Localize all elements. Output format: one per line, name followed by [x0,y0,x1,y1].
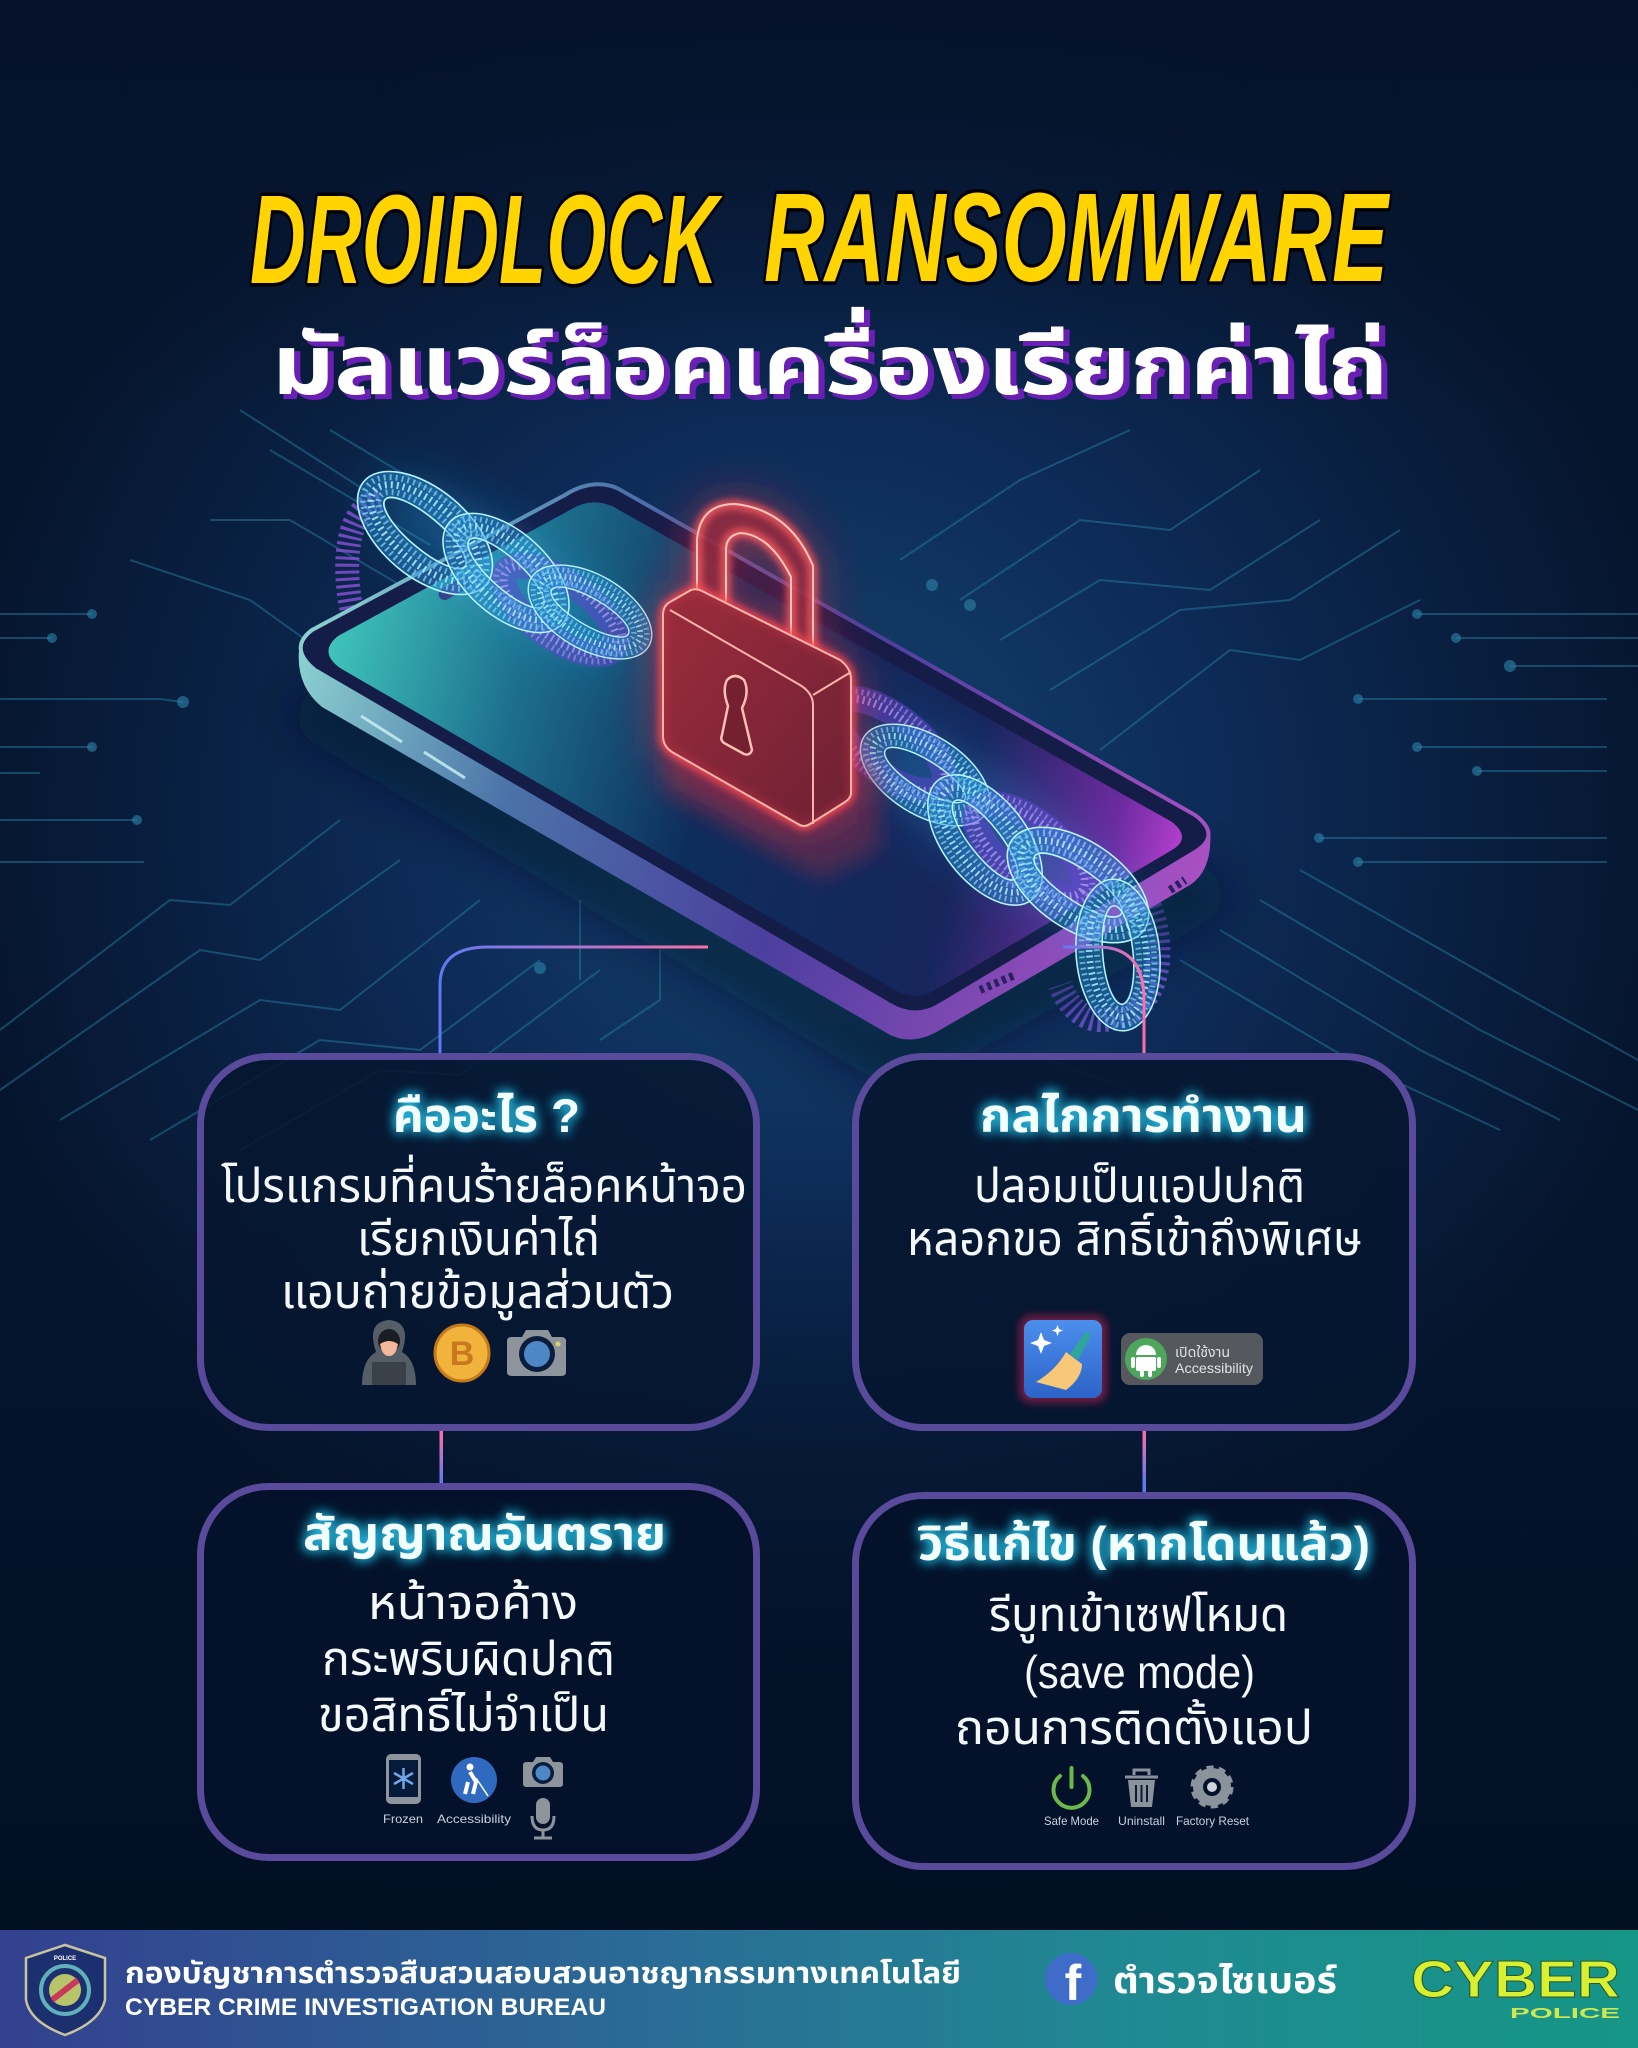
logo: cyber police: POLICE [1510,2005,1620,2022]
panel frame [200,1486,756,1858]
side buttons [361,716,465,778]
icon: bitcoin: B [450,1335,474,1373]
subtitle Thai: มัลแวร์ล็อคเครื่องเรียกค่าไถ่ [277,310,1393,416]
footer band [0,1930,1638,2048]
icon: uninstall [1118,1770,1165,1828]
icon: camera [507,1330,566,1376]
body text: หน้าจอค้าง [368,1576,578,1629]
badge: enable accessibility [1121,1333,1263,1385]
icon: camera [523,1757,563,1787]
body text: โปรแกรมที่คนร้ายล็อคหน้าจอ [221,1154,747,1212]
icon: frozen phone [383,1754,423,1826]
icon: uninstall: Uninstall [1118,1814,1165,1828]
body text: กระพริบผิดปกติ [322,1632,615,1685]
badge: enable accessibility: Accessibility [1175,1360,1253,1376]
heading: กลไกการทำงาน [980,1089,1307,1142]
chain behind phone [347,500,1158,1020]
lock glow [663,504,851,826]
phone side [299,640,1210,1040]
circuit board background pattern [0,410,1638,1150]
panel frame [200,1056,756,1428]
bureau name [125,1958,961,2021]
heading: สัญญาณอันตราย [303,1507,666,1560]
icon: facebook: f [1065,1955,1082,2011]
icon: hacker [362,1320,416,1385]
shackle [697,504,813,658]
connector: middle left [440,1431,443,1485]
icon: bitcoin [435,1325,489,1381]
icon: frozen phone: Frozen [383,1812,423,1826]
logo: cyber police: CYBER [1411,1951,1620,2009]
logo: police shield [26,1945,105,2035]
phone illustration [299,484,1220,1060]
panel frame [856,1496,1412,1866]
icon: factory reset: Factory Reset [1176,1814,1250,1828]
icon: safe mode: Safe Mode [1044,1814,1099,1828]
body text: (save mode) [1024,1646,1255,1698]
connector: top right [1063,947,1144,1053]
phone face bezel [301,484,1208,1013]
keyhole [721,676,752,754]
facebook page name: ตำรวจไซเบอร์ [1113,1960,1337,2001]
body text: หลอกขอ สิทธิ์เข้าถึงพิเศษ [907,1212,1362,1265]
body text: ปลอมเป็นแอปปกติ [974,1159,1305,1212]
panel: how it works [856,1056,1412,1428]
lock front edge [670,610,851,824]
subtitle Thai: มัลแวร์ล็อคเครื่องเรียกค่าไถ่ [272,306,1388,412]
icon: android [1125,1338,1167,1380]
background dark fade [0,1150,1638,1930]
panel: how to fix [856,1496,1412,1866]
body text [221,1154,747,1320]
background top fade [0,0,1638,420]
body text: แอบถ่ายข้อมูลส่วนตัว [281,1265,674,1320]
bureau name: CYBER CRIME INVESTIGATION BUREAU [125,1994,606,2021]
lock body [663,589,851,826]
icon: broom app [1019,1315,1107,1403]
chain: right section [810,671,1169,1034]
body text: เรียกเงินค่าไถ่ [357,1212,600,1265]
icon: safe mode [1044,1768,1099,1828]
connector: middle right [1142,1431,1146,1493]
title: DroidLock Ransomware [250,167,1391,310]
chain: left section [335,448,668,683]
heading: วิธีแก้ไข (หากโดนแล้ว) [917,1517,1370,1570]
icon: facebook [1045,1953,1097,2011]
panel: what is it [200,1056,756,1428]
icon: accessibility [437,1757,511,1826]
body text: ถอนการติดตั้งแอป [955,1699,1313,1754]
bureau name: กองบัญชาการตำรวจสืบสวนสอบสวนอาชญากรรมทางเทคโนโลยี [125,1958,961,1990]
panel: danger signs [200,1486,756,1858]
phone shadow [300,700,1220,1060]
icon: microphone [532,1798,554,1838]
lock reflection [663,720,880,880]
heading: คืออะไร ? [393,1089,580,1142]
phone screen [328,502,1182,996]
icon: factory reset [1176,1768,1250,1828]
body text [907,1159,1362,1265]
body text: รีบูทเข้าเซฟโหมด [989,1588,1288,1643]
circuit node dots [47,579,1516,974]
camera notch [436,574,474,602]
body text [318,1576,615,1741]
padlock [663,504,880,880]
body text: ขอสิทธิ์ไม่จำเป็น [318,1688,609,1741]
connector: top left [440,947,708,1053]
speaker holes [980,880,1185,990]
badge: enable accessibility: เปิดใช้งาน [1175,1344,1230,1360]
panel frame [856,1056,1412,1428]
body text [955,1588,1313,1754]
logo: police shield: POLICE [54,1956,76,1962]
icon: accessibility: Accessibility [437,1812,511,1826]
title: DroidLock Ransomware: DROIDLOCK [250,169,723,310]
